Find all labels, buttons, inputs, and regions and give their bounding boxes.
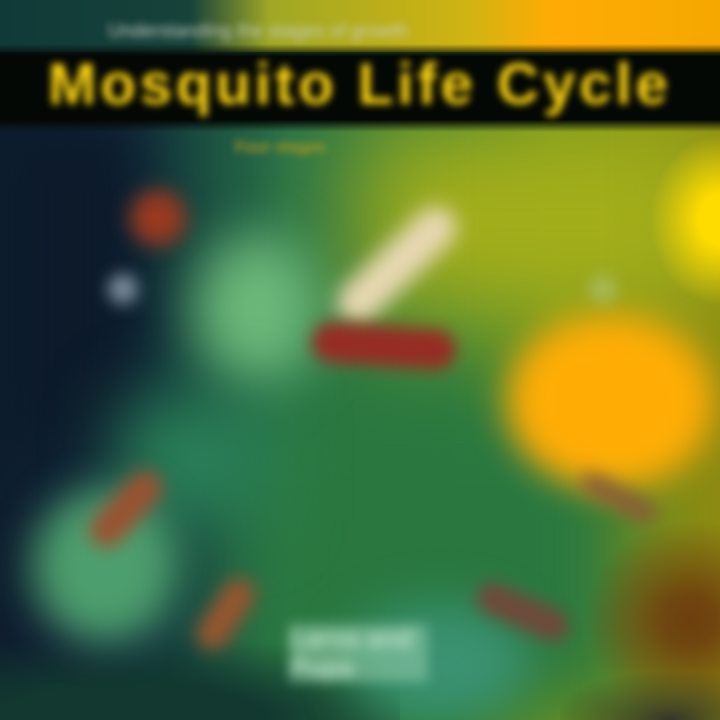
glow: bright yellow sun edge	[600, 120, 720, 320]
icon: small insect on orange circle	[578, 470, 660, 526]
icon: pupa stage	[190, 572, 262, 656]
title band	[0, 44, 720, 132]
background glow: yellow-green upper right	[360, 120, 720, 320]
panel: brown lower right corner	[570, 510, 720, 720]
caption: Four stages	[235, 139, 326, 156]
icon: larva stage	[83, 463, 169, 555]
background glow: dark lower left edge	[0, 620, 400, 720]
panel: orange circle	[506, 314, 714, 490]
panel: lower teal patch	[350, 605, 530, 720]
glow: green band under patch	[120, 400, 270, 520]
header gradient strip	[0, 0, 720, 52]
panel: lower left light green circle	[32, 488, 178, 643]
label dot: upper right	[590, 276, 616, 302]
icon: adult mosquito body	[311, 321, 457, 371]
glow: pale green central patch	[195, 235, 320, 385]
icon: egg stage	[130, 190, 186, 246]
background glow: dark left edge	[0, 120, 140, 450]
label dot: egg stage	[108, 274, 138, 304]
text block: lower label: Pupa	[290, 652, 354, 682]
title: Mosquito Life Cycle	[48, 52, 672, 117]
icon: adult mosquito wing	[328, 198, 466, 332]
text block: lower label	[290, 624, 428, 682]
icon: lower right larva	[472, 577, 574, 647]
panel: dark bottom right corner	[560, 660, 720, 720]
background glow: dark green lower field	[250, 400, 620, 700]
